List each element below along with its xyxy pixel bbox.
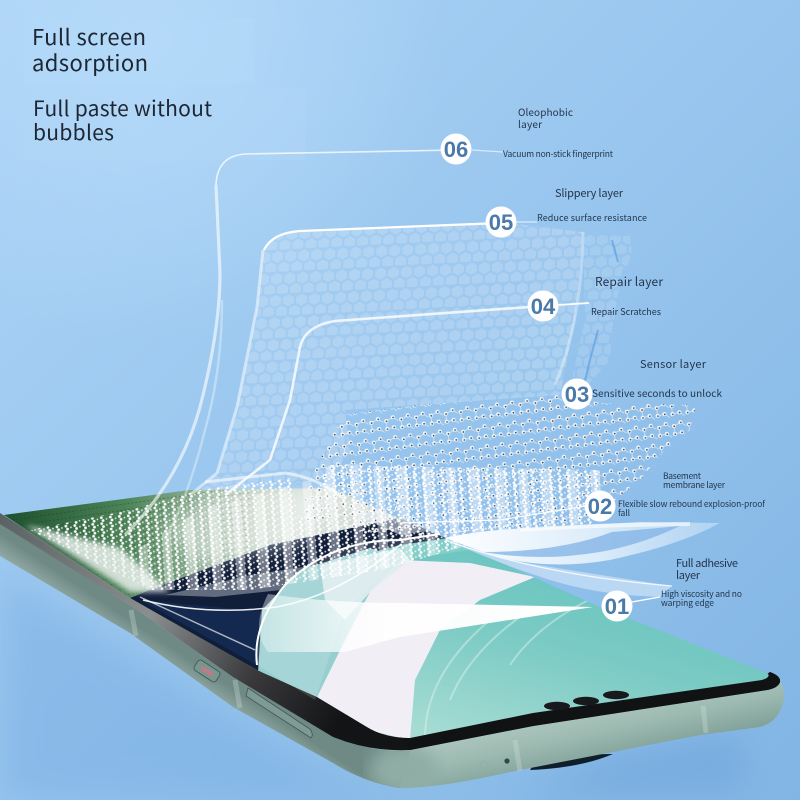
label 02: Flexible slow rebound explosion-proof: [618, 498, 766, 510]
ribbon to label: [440, 537, 672, 597]
phone metal frame: [333, 678, 784, 788]
number badge 03: 03: [565, 382, 589, 407]
navy wallpaper region: [130, 518, 470, 672]
layer 04: repair film: [205, 303, 589, 500]
heading: full screen adsorption: Full screen: [32, 20, 146, 52]
label 06: Oleophobic: [518, 104, 573, 119]
number badge 05: [486, 206, 516, 238]
camera holes: [544, 691, 629, 710]
charging holes: [480, 758, 510, 769]
label 03: Sensor layer: [640, 356, 707, 372]
heading: full screen adsorption: [32, 20, 148, 78]
label 02: fall: [618, 507, 631, 519]
teal under the film: [258, 548, 382, 697]
label 01: warping edge: [661, 597, 714, 609]
dome edge: [256, 535, 470, 700]
power port: [193, 659, 221, 683]
label 05: [537, 185, 647, 224]
label 01: Full adhesive: [676, 555, 738, 571]
label 02: Basement: [663, 470, 702, 482]
number badge 06: 06: [444, 137, 468, 162]
label 03: [592, 356, 722, 400]
label 01: layer: [676, 567, 701, 583]
label 04: [591, 273, 663, 318]
label 06: [503, 104, 614, 160]
label 05: Reduce surface resistance: [537, 211, 647, 224]
number badge 02: 02: [588, 494, 612, 519]
number badge 02: [584, 490, 616, 522]
layer 01: adhesive film: [140, 534, 672, 700]
heading: full screen adsorption: adsorption: [32, 46, 148, 78]
layer 06: oleophobic film: [125, 150, 503, 535]
label 05: Slippery layer: [555, 185, 624, 201]
label 04: Repair layer: [595, 273, 663, 290]
layer 03: sensor dot mesh: [25, 393, 696, 592]
label 02: [618, 470, 766, 519]
white beam to circle: [259, 594, 593, 652]
text backing patch: top-left headings: [24, 18, 305, 160]
layer 05: slippery hex film: [190, 222, 631, 495]
phone: [0, 486, 784, 796]
number badge 01: 01: [605, 594, 629, 619]
label 03: Sensitive seconds to unlock: [592, 385, 722, 400]
phone shadow foot: [530, 754, 613, 770]
screen: [4, 488, 769, 738]
number badge 03: [562, 378, 592, 410]
white wallpaper region: [317, 560, 535, 740]
black bezel: [0, 513, 780, 750]
lower film edge: [140, 597, 255, 650]
label 04: Repair Scratches: [591, 305, 661, 318]
green wallpaper region: [0, 486, 400, 598]
screen artwork: [0, 486, 610, 740]
heading: full paste without bubbles: [33, 93, 212, 147]
label 01: [661, 555, 742, 609]
number badge 06: [440, 134, 472, 164]
frame corner blend: [366, 747, 436, 788]
curve lines on wallpaper: [424, 600, 588, 736]
layer 02: basement membrane ribbons: [400, 506, 720, 564]
thin sweep line: [143, 545, 400, 610]
number badge 04: 04: [531, 294, 556, 319]
label 02: membrane layer: [663, 479, 726, 491]
label 01: High viscosity and no: [661, 588, 742, 600]
number badge 05: 05: [489, 210, 513, 235]
number badge 01: [602, 590, 632, 622]
number badge 04: [528, 290, 558, 322]
left side of frame: [0, 523, 410, 788]
antenna bands: [131, 610, 706, 771]
label 06: Vacuum non-stick fingerprint: [503, 148, 614, 160]
label 06: layer: [518, 116, 542, 131]
volume button: [246, 688, 312, 738]
heading: full paste without bubbles: bubbles: [33, 117, 114, 147]
heading: full paste without bubbles: Full paste without: [33, 93, 212, 123]
